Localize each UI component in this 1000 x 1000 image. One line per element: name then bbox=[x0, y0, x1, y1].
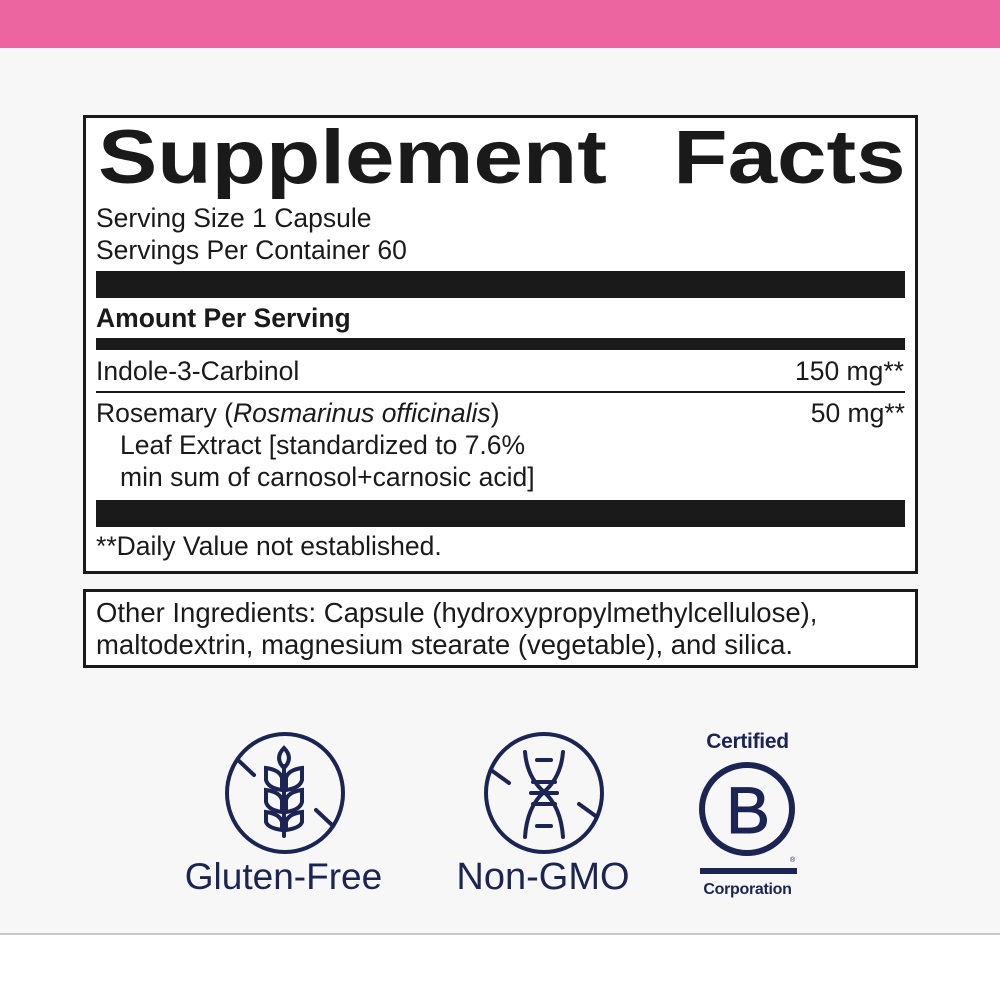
title: Facts bbox=[674, 115, 906, 200]
title: Supplement bbox=[98, 115, 607, 200]
pink header bar bbox=[0, 0, 1000, 48]
row: indole-3-carbinol: Indole-3-Carbinol bbox=[96, 356, 299, 386]
footnote: **Daily Value not established. bbox=[96, 531, 442, 561]
icon: non-gmo: Non-GMO bbox=[456, 856, 630, 898]
row: rosemary bbox=[96, 398, 905, 492]
icon: certified b corporation: Corporation bbox=[703, 881, 792, 898]
panel: other ingredients: maltodextrin, magnesium stearate (vegetable), and silica. bbox=[96, 629, 793, 660]
icon: gluten-free: Gluten-Free bbox=[185, 856, 382, 897]
title bbox=[98, 115, 906, 200]
icon: certified b corporation: Certified bbox=[706, 730, 789, 753]
panel: supplement facts label bbox=[83, 115, 918, 574]
amount per serving heading: Amount Per Serving bbox=[96, 303, 351, 333]
icon: gluten-free bbox=[185, 732, 382, 897]
panel: other ingredients: Other Ingredients: Capsule (hydroxypropylmethylcellulose), bbox=[96, 597, 817, 628]
panel: other ingredients bbox=[83, 589, 918, 668]
row: rosemary: Rosemary (Rosmarinus officinalis) bbox=[96, 398, 500, 428]
icon: non-gmo bbox=[456, 732, 630, 898]
text: 150 mg** bbox=[795, 356, 904, 386]
row: rosemary: 50 mg** bbox=[811, 398, 905, 428]
icon: certified b corporation: ® bbox=[790, 856, 796, 864]
row: rosemary: min sum of carnosol+carnosic acid] bbox=[120, 462, 535, 492]
text: Servings Per Container 60 bbox=[96, 235, 407, 265]
icon: certified b corporation: B bbox=[726, 773, 770, 847]
serving info: Serving Size 1 Capsule bbox=[96, 203, 371, 233]
row: rosemary: Leaf Extract [standardized to 7.6% bbox=[120, 430, 525, 460]
icon: certified b corporation bbox=[699, 730, 797, 898]
